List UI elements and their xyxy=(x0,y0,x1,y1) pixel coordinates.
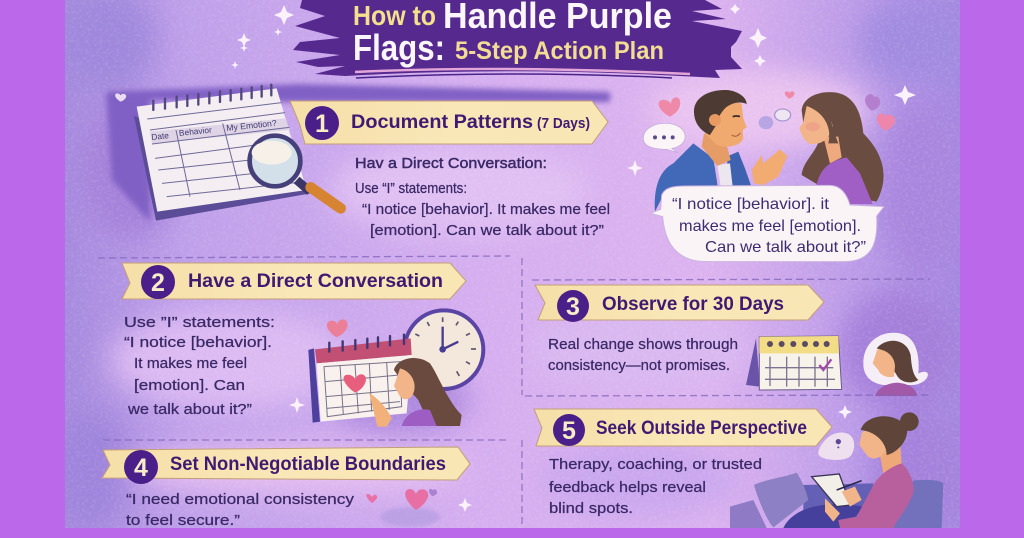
step 5 number xyxy=(553,414,585,446)
speech bubble text: Can we talk about it?” xyxy=(705,239,866,256)
figure: man xyxy=(655,90,787,212)
speech bubble text: “I notice [behavior]. it xyxy=(672,196,830,213)
step 3 number: 3 xyxy=(566,293,580,321)
step 1 number xyxy=(305,106,339,140)
step 1 text block: [emotion]. Can we talk about it?” xyxy=(370,222,604,239)
step 2 text block xyxy=(124,314,275,418)
step 5 text block xyxy=(549,456,762,517)
illustration: couple talking xyxy=(643,90,895,262)
figure: woman portrait xyxy=(863,333,928,396)
step 2 text block: [emotion]. Can xyxy=(134,377,245,394)
icon: notebook table with magnifying glass: My Emotion? xyxy=(226,118,277,133)
sparkles xyxy=(231,4,916,512)
icon: calendar xyxy=(308,335,412,423)
icon: small hearts xyxy=(115,93,126,102)
step 5 text block: feedback helps reveal xyxy=(549,479,706,496)
step 1 banner: (7 Days) xyxy=(537,115,590,132)
step 5 banner xyxy=(534,409,832,446)
step 3 banner xyxy=(535,285,824,322)
step 1 banner: Document Patterns xyxy=(351,112,533,133)
step 4 banner xyxy=(102,447,470,484)
step 3 number xyxy=(557,290,589,322)
icon: sofa xyxy=(730,473,943,528)
illustration: woman with calendar and clock xyxy=(308,310,483,427)
step 3 text block: Real change shows through xyxy=(548,336,738,353)
step 5 number: 5 xyxy=(562,417,576,445)
step 5 text block: Therapy, coaching, or trusted xyxy=(549,456,762,473)
icon: notebook table with magnifying glass xyxy=(115,85,341,221)
icon: hearts and speech bubbles xyxy=(643,91,895,153)
step 2 text block: we talk about it?” xyxy=(127,401,252,418)
step 4 text block xyxy=(126,491,355,529)
dark brush band behind step 1 and notebook xyxy=(106,84,610,222)
step 3 banner: Observe for 30 Days xyxy=(602,294,784,315)
icon: hearts xyxy=(366,489,440,527)
step 3 text block: consistency—not promises. xyxy=(548,357,730,374)
step 2 number xyxy=(141,265,175,299)
step 1 text block: “I notice [behavior]. It makes me feel xyxy=(362,201,610,218)
step 4 banner: Set Non-Negotiable Boundaries xyxy=(170,454,446,475)
figure: woman xyxy=(812,412,919,528)
icon: heart xyxy=(327,319,348,337)
title: 5-Step Action Plan xyxy=(455,37,664,65)
step 1 text block xyxy=(355,155,610,239)
figure: woman xyxy=(799,92,884,204)
figure: woman xyxy=(369,358,462,427)
speech bubble xyxy=(651,185,884,262)
illustration: calendar and woman portrait xyxy=(746,333,928,396)
step 2 text block: “I notice [behavior]. xyxy=(124,334,272,351)
speech bubble text: makes me feel [emotion]. xyxy=(679,218,861,235)
step 4 number xyxy=(124,450,158,484)
step 1 banner xyxy=(290,101,608,144)
step 2 banner: Have a Direct Conversation xyxy=(188,271,443,292)
icon: clock xyxy=(405,310,483,389)
step 3 text block xyxy=(548,336,738,374)
step 1 text block: Use “I” statements: xyxy=(355,180,467,197)
icon: notebook table with magnifying glass: Date xyxy=(151,130,170,142)
speech bubble text xyxy=(672,196,866,256)
dashed dividers xyxy=(98,256,930,528)
step 4 number: 4 xyxy=(134,454,148,482)
step 1 text block: Hav a Direct Conversation: xyxy=(355,155,547,172)
title banner: purple brush stroke xyxy=(293,0,742,78)
step 2 number: 2 xyxy=(151,269,165,297)
icon: checklist calendar xyxy=(746,336,842,390)
step 4 text block: to feel secure.” xyxy=(126,512,240,529)
step 4 text block: “I need emotional consistency xyxy=(126,491,355,508)
step 2 text block: It makes me feel xyxy=(134,355,247,372)
step 1 number: 1 xyxy=(315,110,329,138)
icon: notebook table with magnifying glass: Behavior xyxy=(178,125,212,138)
step 2 banner xyxy=(122,263,466,299)
illustration: woman journaling on sofa xyxy=(730,412,943,528)
title xyxy=(353,0,672,68)
step 5 text block: blind spots. xyxy=(549,500,633,517)
step 2 text block: Use ”I” statements: xyxy=(124,314,275,331)
title: Flags: xyxy=(353,27,445,68)
step 5 banner: Seek Outside Perspective xyxy=(596,418,807,439)
title: How to xyxy=(353,0,436,31)
icon: thought bubble xyxy=(818,432,854,460)
